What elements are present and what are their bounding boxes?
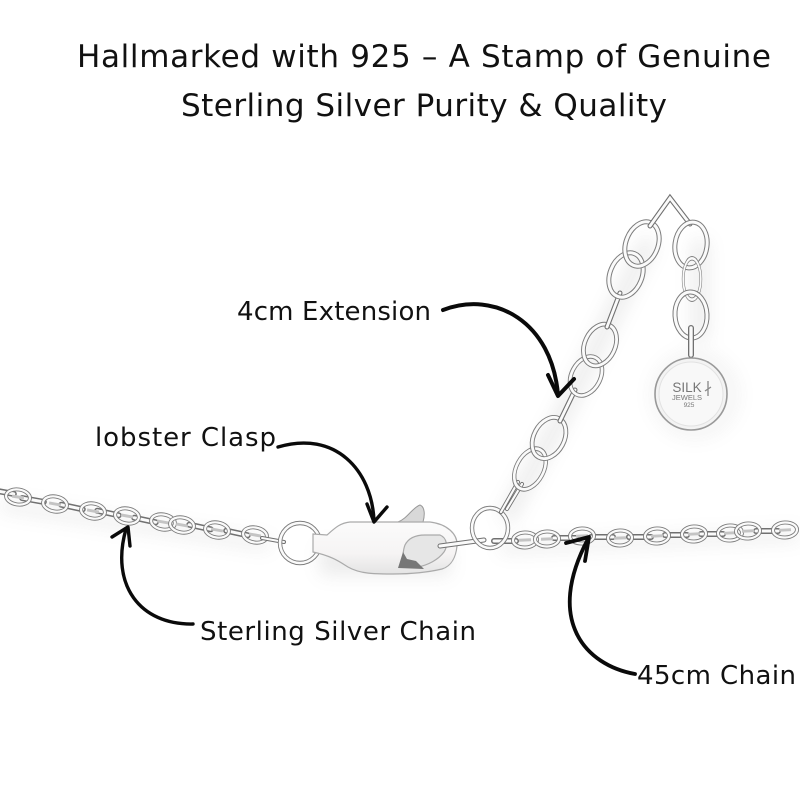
label: 45cm chain: 45cm Chain <box>637 661 796 691</box>
label: lobster clasp: lobster Clasp <box>95 423 276 453</box>
round 925 tag: JEWELS <box>672 393 702 402</box>
top clip <box>650 198 690 226</box>
arrow: to 45cm chain <box>566 537 635 674</box>
right chain: 45cm chain <box>494 522 797 548</box>
title: Sterling Silver Purity & Quality <box>181 88 667 124</box>
soft shadow under jewellery <box>0 240 800 560</box>
round 925 tag: SILK <box>672 380 702 395</box>
label: sterling silver chain: Sterling Silver Chain <box>200 617 476 647</box>
left chain: sterling silver chain <box>0 488 284 544</box>
extension chain <box>472 198 710 548</box>
arrow: to extension <box>443 304 574 396</box>
lobster clasp <box>313 505 484 574</box>
label: 4cm extension: 4cm Extension <box>237 297 431 327</box>
title <box>77 39 771 124</box>
title: Hallmarked with 925 – A Stamp of Genuine <box>77 39 771 75</box>
arrow: to clasp <box>278 443 387 522</box>
jump ring <box>280 523 320 563</box>
arrow: to sterling chain <box>112 527 193 624</box>
round 925 tag: 925 <box>684 402 695 409</box>
round 925 tag <box>655 358 727 430</box>
